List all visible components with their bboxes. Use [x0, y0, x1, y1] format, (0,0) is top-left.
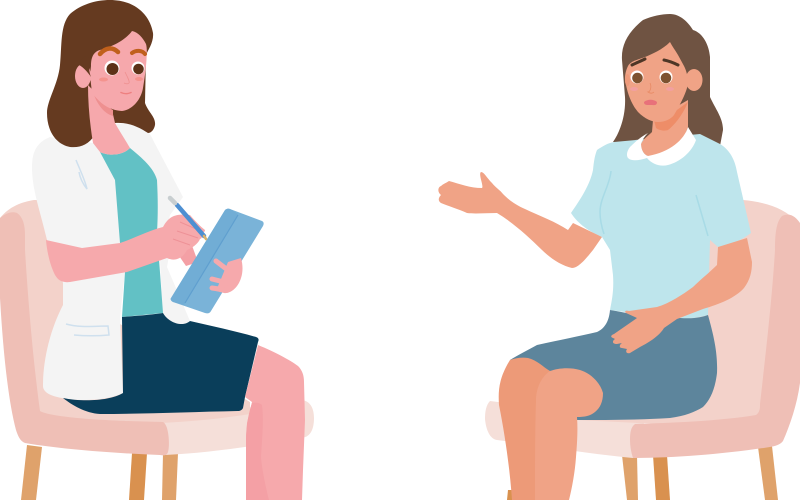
forearm and writing hand: doctor: [46, 215, 205, 282]
shirt: doctor: [100, 148, 163, 317]
shirt fold lines: [600, 171, 708, 236]
neck: doctor: [88, 85, 130, 155]
supporting hand: [212, 258, 242, 293]
arm and gesturing hand: patient: [438, 172, 602, 268]
clipboard hand: doctor: [175, 240, 198, 266]
skirt: patient: [510, 310, 717, 420]
clipboard: [171, 209, 264, 313]
neck shadow: patient: [654, 102, 688, 131]
coat fold lines: [66, 160, 109, 336]
lab coat: doctor: [32, 123, 190, 400]
face details: doctor: [99, 48, 145, 94]
collar: [627, 127, 696, 166]
person: doctor: [32, 0, 305, 500]
person: patient: [438, 14, 752, 500]
chair: doctor: [0, 200, 314, 500]
ear: patient: [686, 69, 702, 91]
crossed legs: patient: [499, 358, 603, 500]
chair: patient: [485, 200, 800, 500]
hair: doctor: [47, 0, 155, 147]
face: doctor: [75, 31, 147, 111]
neck shadow: [93, 92, 113, 116]
hair: patient: [613, 14, 723, 146]
face details: patient: [625, 59, 678, 105]
resting arm and hand: patient: [611, 238, 752, 353]
pen: [170, 198, 206, 239]
shirt: patient: [571, 134, 751, 319]
finger lines: [173, 222, 203, 245]
crossed legs: doctor: [245, 345, 305, 500]
neck: patient: [641, 100, 688, 156]
face: patient: [625, 42, 688, 122]
skirt: doctor: [63, 313, 259, 414]
